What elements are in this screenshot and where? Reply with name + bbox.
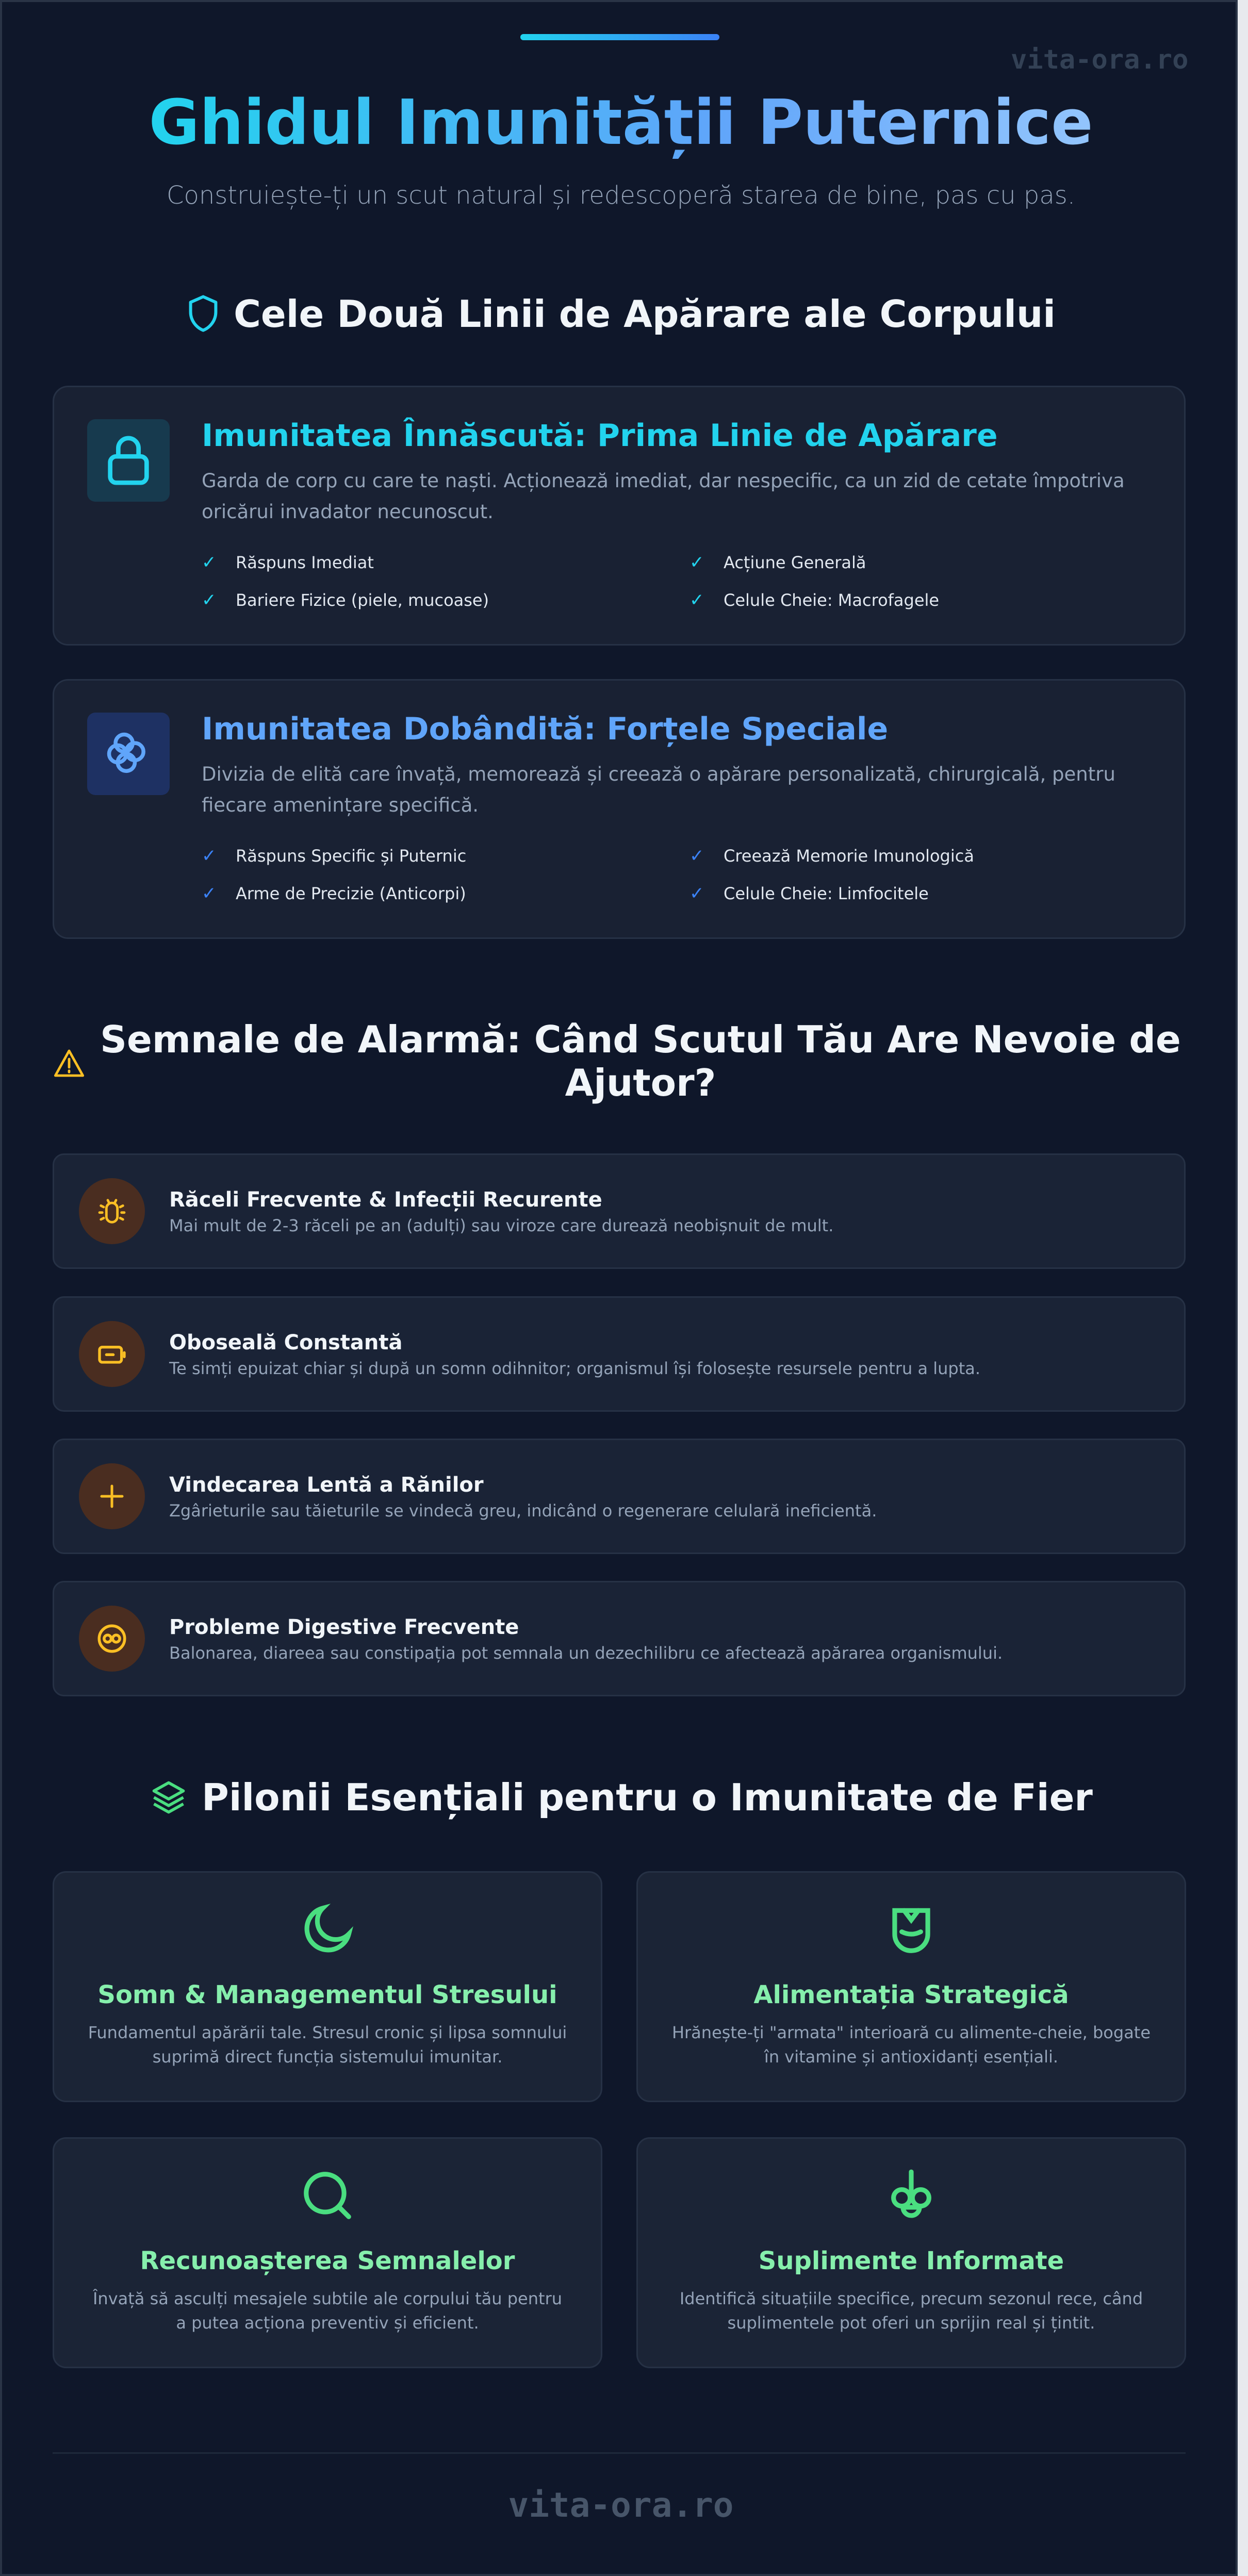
checklist: ✓ bbox=[202, 883, 217, 904]
alarm card: frequent colds bbox=[53, 1153, 1186, 1269]
card description: Garda de corp cu care te naști. Acționează imediat, dar nespecific, ca un zid de cetate împotriva bbox=[202, 470, 1125, 492]
card description: oricărui invadator necunoscut. bbox=[202, 501, 494, 523]
footer divider bbox=[53, 2452, 1186, 2454]
checklist: Arme de Precizie (Anticorpi) bbox=[236, 884, 466, 903]
footer brand: vita-ora.ro bbox=[508, 2485, 734, 2525]
pillar: sleep: Fundamentul apărării tale. Stresul cronic și lipsa somnului bbox=[88, 2023, 567, 2042]
panel: acquired immunity bbox=[53, 679, 1186, 939]
pillar: sleep bbox=[53, 1871, 602, 2102]
alarm card: fatigue: Oboseală Constantă bbox=[169, 1331, 402, 1355]
pillar: signals: a putea acționa preventiv și eficient. bbox=[176, 2313, 479, 2333]
card description: Divizia de elită care învață, memorează și creează o apărare personalizată, chirurgicală, pentru bbox=[202, 763, 1115, 785]
pillar: sleep: suprimă direct funcția sistemului imunitar. bbox=[153, 2047, 502, 2067]
checklist: Răspuns Imediat bbox=[236, 553, 374, 572]
pillar: nutrition bbox=[636, 1871, 1186, 2102]
watermark top: vita-ora.ro bbox=[1011, 44, 1188, 75]
heading: warning signs: Semnale de Alarmă: Când Scutul Tău Are Nevoie de Ajutor? bbox=[100, 1018, 1181, 1104]
alarm card: fatigue: Te simți epuizat chiar și după un somn odihnitor; organismul își folosește resursele pentru a lupta. bbox=[169, 1359, 980, 1378]
checklist bbox=[202, 552, 939, 610]
checklist: ✓ bbox=[689, 552, 704, 573]
alarm card: digestive bbox=[53, 1581, 1186, 1696]
pillar: signals bbox=[53, 2137, 602, 2368]
alarm card: fatigue bbox=[53, 1296, 1186, 1412]
card title: Imunitatea Înnăscută: Prima Linie de Apărare bbox=[202, 418, 998, 454]
pillar: sleep: Somn & Managementul Stresului bbox=[97, 1980, 557, 2009]
title: Ghidul Imunității Puternice bbox=[149, 87, 1093, 159]
checklist: ✓ bbox=[202, 552, 217, 573]
icon: plant bbox=[891, 2170, 931, 2218]
alarm card: frequent colds: Răceli Frecvente & Infecții Recurente bbox=[169, 1188, 602, 1212]
panel: innate immunity bbox=[53, 386, 1186, 646]
card description bbox=[202, 763, 1115, 816]
card description bbox=[202, 470, 1125, 523]
icon: warning bbox=[54, 1050, 85, 1077]
heading: pillars: Pilonii Esențiali pentru o Imunitate de Fier bbox=[202, 1776, 1093, 1819]
checklist: Celule Cheie: Macrofagele bbox=[724, 590, 939, 610]
icon: lock bbox=[87, 419, 170, 502]
checklist bbox=[202, 846, 974, 904]
checklist: ✓ bbox=[202, 590, 217, 610]
subtitle: Construiește-ți un scut natural și redescoperă starea de bine, pas cu pas. bbox=[167, 181, 1075, 210]
icon: cells bbox=[87, 713, 170, 795]
heading: two lines of defense: Cele Două Linii de Apărare ale Corpului bbox=[234, 292, 1056, 336]
pillar: supplements: Identifică situațiile specifice, precum sezonul rece, când bbox=[680, 2289, 1143, 2308]
icon: gut bbox=[79, 1606, 145, 1672]
card description: fiecare amenințare specifică. bbox=[202, 794, 479, 816]
card title: Imunitatea Dobândită: Forțele Speciale bbox=[202, 711, 888, 747]
alarm card: frequent colds: Mai mult de 2-3 răceli pe an (adulți) sau viroze care durează neobișnuit de mult. bbox=[169, 1216, 833, 1235]
pillar: signals: Recunoașterea Semnalelor bbox=[140, 2247, 515, 2275]
checklist: ✓ bbox=[689, 590, 704, 610]
pillar: nutrition: în vitamine și antioxidanți esențiali. bbox=[764, 2047, 1058, 2067]
icon: plus bbox=[79, 1463, 145, 1529]
pillar: supplements: Suplimente Informate bbox=[759, 2247, 1064, 2275]
icon: search bbox=[304, 2172, 351, 2219]
alarm card: digestive: Balonarea, diareea sau constipația pot semnala un dezechilibru ce afectează apărarea organismului. bbox=[169, 1643, 1003, 1663]
pillar: supplements: suplimentele pot oferi un sprijin real și țintit. bbox=[728, 2313, 1095, 2333]
checklist: Acțiune Generală bbox=[724, 553, 866, 572]
pillar: nutrition: Hrănește-ți "armata" interioară cu alimente-cheie, bogate bbox=[672, 2023, 1151, 2042]
alarm card: slow healing: Vindecarea Lentă a Rănilor bbox=[169, 1473, 484, 1497]
icon: bug bbox=[79, 1178, 145, 1244]
pillar: signals: Învață să asculți mesajele subtile ale corpului tău pentru bbox=[93, 2289, 562, 2308]
pillar: nutrition: Alimentația Strategică bbox=[753, 1980, 1069, 2009]
alarm card: digestive: Probleme Digestive Frecvente bbox=[169, 1615, 519, 1639]
checklist: Celule Cheie: Limfocitele bbox=[724, 884, 929, 903]
checklist: Răspuns Specific și Puternic bbox=[236, 846, 466, 866]
pillar: supplements bbox=[636, 2137, 1186, 2368]
checklist: Creează Memorie Imunologică bbox=[724, 846, 974, 866]
top accent bar bbox=[520, 34, 719, 40]
icon: food bbox=[892, 1908, 930, 1953]
checklist: ✓ bbox=[689, 846, 704, 866]
icon: battery bbox=[79, 1321, 145, 1387]
alarm card: slow healing bbox=[53, 1439, 1186, 1554]
checklist: ✓ bbox=[202, 846, 217, 866]
checklist: Bariere Fizice (piele, mucoase) bbox=[236, 590, 489, 610]
alarm card: slow healing: Zgârieturile sau tăieturile se vindecă greu, indicând o regenerare celulară ineficientă. bbox=[169, 1501, 877, 1521]
checklist: ✓ bbox=[689, 883, 704, 904]
icon: moon bbox=[304, 1904, 353, 1952]
